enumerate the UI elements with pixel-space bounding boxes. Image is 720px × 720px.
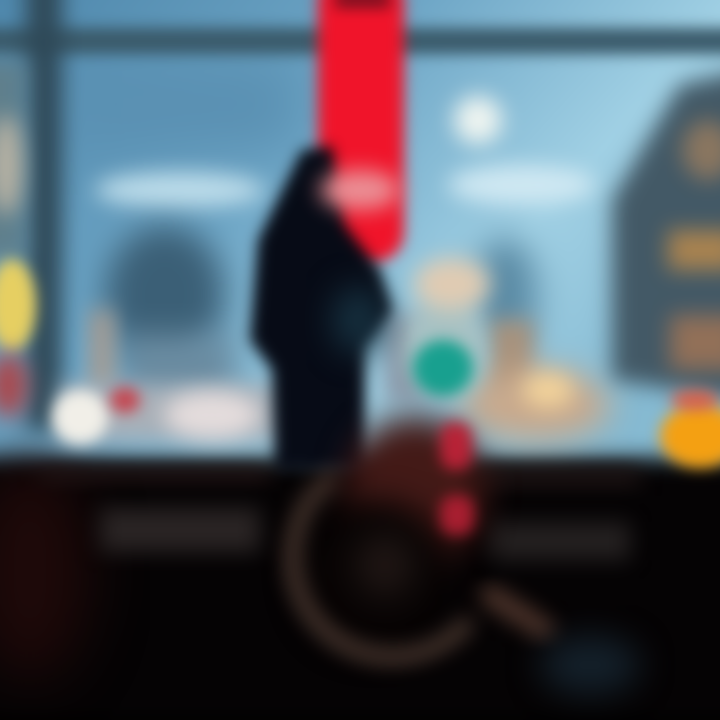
dashboard upper right band: [480, 466, 640, 486]
dashboard blurred highlight right: [490, 522, 630, 560]
left red light: [0, 353, 28, 417]
steering wheel: ring: [292, 475, 470, 657]
sky darker upper band: [60, 60, 300, 150]
white light left: [52, 390, 108, 444]
city horizon haze: [60, 385, 280, 440]
pale object above teal: [414, 258, 490, 310]
teal object: [413, 340, 473, 396]
background: dark lower area: [0, 458, 720, 720]
window frame: horizontal bar: [0, 28, 720, 54]
right dark building: [612, 70, 720, 400]
right horizon lights: [460, 369, 610, 441]
figure: pale highlight on red pole: [320, 170, 400, 210]
orange bright light: [660, 404, 720, 468]
lower left maroon tint: [0, 460, 90, 680]
steering wheel: dark interior: [300, 500, 450, 650]
left yellow light: [0, 259, 36, 351]
figure: dark silhouette: [250, 146, 392, 470]
hand: brown tint over wheel top: [345, 415, 485, 565]
pale tower left: [90, 310, 114, 390]
figure: dark blue shoulder tint: [332, 286, 384, 354]
warm bright spot: [522, 372, 574, 408]
hand tail highlight: [490, 595, 545, 630]
white cloud glow right: [448, 165, 596, 205]
pale haze around teal: [403, 295, 487, 395]
building window glow middle: [668, 230, 720, 270]
red strap upper: [440, 422, 472, 470]
building window glow top: [682, 120, 720, 180]
left edge panel: [0, 60, 26, 260]
red light left: [110, 387, 140, 413]
dashboard blurred highlight left: [100, 508, 260, 552]
building window glow lower: [670, 315, 720, 370]
building base left: [125, 335, 235, 400]
dashboard blurred highlight upper left: [40, 466, 270, 482]
red tint above orange light: [671, 390, 719, 410]
distant dark building left: [105, 225, 225, 365]
red strap lower: [440, 495, 474, 535]
window frame: vertical bar: [26, 0, 62, 430]
white light middle: [164, 391, 260, 439]
lower blue reflection: [540, 635, 640, 695]
steering wheel: centre: [355, 533, 415, 597]
grey haze beside figure: [385, 315, 425, 400]
background: sky: [0, 0, 720, 480]
left edge light patch: [0, 115, 22, 215]
moon: [454, 96, 502, 144]
white cloud glow left: [95, 172, 265, 208]
red pole: [318, 0, 404, 262]
right skyline haze: [473, 237, 537, 353]
dark pole cap: [335, 0, 390, 8]
right tan building: [488, 320, 534, 400]
